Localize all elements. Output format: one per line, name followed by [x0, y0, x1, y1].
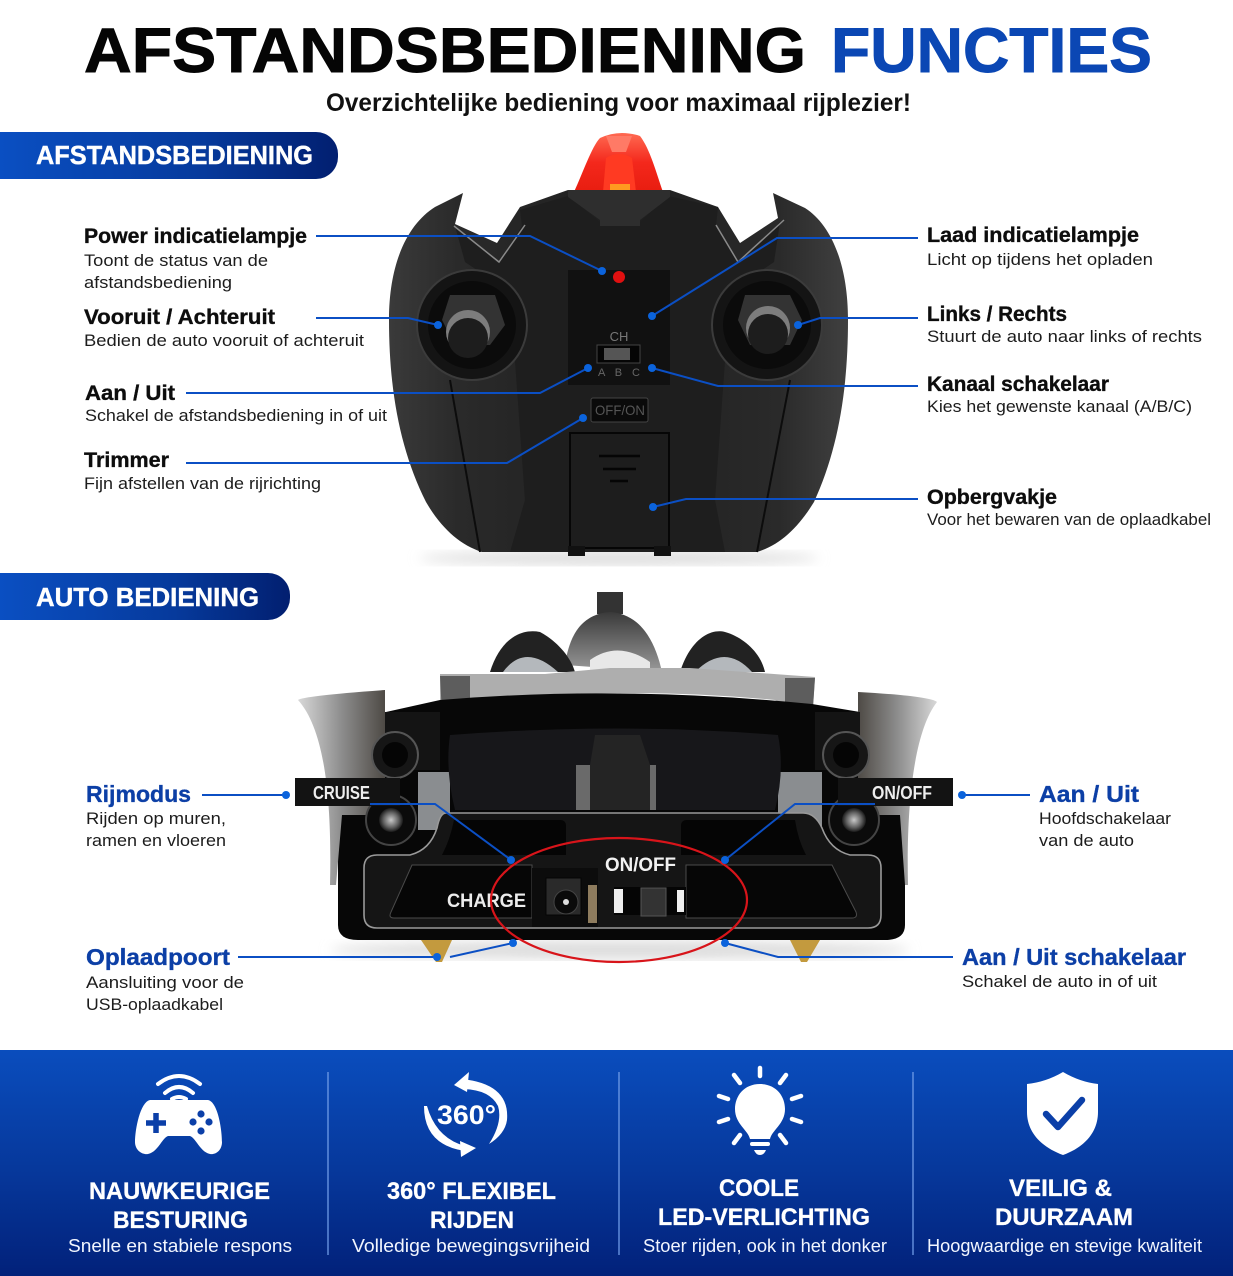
label: kanaal schakelaar: Kies het gewenste kanaal (A/B/C) [927, 397, 1192, 416]
label: power indicatielampje: afstandsbediening [84, 273, 232, 292]
car photo [295, 592, 953, 962]
section header: afstandsbediening: AFSTANDSBEDIENING [36, 140, 313, 170]
label: power indicatielampje: Power indicatielampje [84, 225, 307, 248]
feature: veilig en duurzaam [927, 1072, 1202, 1256]
off on switch: OFF/ON [595, 402, 645, 418]
heading: COOLE [719, 1175, 799, 1202]
left lights [366, 732, 418, 845]
section header: auto bediening: AUTO BEDIENING [36, 582, 259, 612]
on off tag: ON/OFF [872, 782, 932, 803]
label: oplaadpoort [86, 944, 244, 1014]
description: Stoer rijden, ook in het donker [643, 1236, 887, 1256]
label: kanaal schakelaar [927, 373, 1192, 416]
label: vooruit achteruit: Bedien de auto vooruit of achteruit [84, 331, 364, 350]
label: aan uit car: van de auto [1039, 831, 1134, 850]
lower windows [390, 865, 856, 918]
remote body [389, 190, 848, 552]
label: trimmer [84, 449, 321, 493]
label: rijmodus: ramen en vloeren [86, 831, 226, 850]
channel switch: A B C [598, 367, 640, 379]
channel switch: CH [610, 329, 628, 344]
label: links rechts [927, 303, 1202, 346]
remote upper centre [455, 196, 780, 552]
front panel [364, 813, 881, 928]
feature: 360 flexibel rijden [352, 1072, 590, 1256]
title: AFSTANDSBEDIENING [84, 16, 806, 86]
gold contacts [421, 940, 820, 962]
label: oplaadpoort: Aansluiting voor de [86, 973, 244, 992]
on off tag [838, 778, 953, 806]
upper vents [442, 820, 806, 855]
heading [387, 1178, 556, 1234]
charge label: CHARGE [447, 891, 526, 912]
left joystick [417, 270, 527, 380]
left exhaust dome [490, 631, 575, 672]
label: laad indicatielampje [927, 224, 1153, 269]
centre collar [568, 190, 670, 226]
heading: BESTURING [113, 1207, 248, 1234]
power switch [614, 887, 686, 916]
description: Hoogwaardige en stevige kwaliteit [927, 1236, 1202, 1256]
label: opbergvakje: Voor het bewaren van de oplaadkabel [927, 510, 1211, 529]
heading: DUURZAAM [995, 1204, 1133, 1231]
off on switch [591, 398, 648, 422]
heading [995, 1175, 1133, 1231]
label: links rechts: Stuurt de auto naar links of rechts [927, 327, 1202, 346]
right chrome fin [858, 692, 937, 885]
car shadow [330, 941, 910, 959]
heading: LED-VERLICHTING [658, 1204, 870, 1231]
subtitle: Overzichtelijke bediening voor maximaal rijplezier! [326, 89, 911, 117]
section header: auto bediening [0, 573, 290, 620]
label: oplaadpoort: USB-oplaadkabel [86, 995, 223, 1014]
right lights [823, 732, 879, 845]
label: aan uit schakelaar [962, 944, 1186, 991]
label: opbergvakje [927, 486, 1211, 529]
remote shadow [419, 551, 819, 565]
centre cavity [448, 728, 781, 810]
label: rijmodus: Rijmodus [86, 781, 191, 807]
label: aan uit schakelaar: Schakel de auto in of uit [962, 972, 1157, 991]
red highlight ellipse [491, 838, 747, 962]
label: opbergvakje: Opbergvakje [927, 486, 1057, 509]
label: rijmodus: Rijden op muren, [86, 809, 226, 828]
cockpit tower [565, 592, 662, 675]
title [84, 16, 1152, 86]
label: oplaadpoort: Oplaadpoort [86, 944, 230, 970]
title: FUNCTIES [831, 16, 1152, 86]
power led [613, 271, 625, 283]
label: trimmer: Fijn afstellen van de rijrichting [84, 474, 321, 493]
label: aan uit car: Hoofdschakelaar [1039, 809, 1171, 828]
label: aan uit car: Aan / Uit [1039, 781, 1139, 807]
right joystick [712, 270, 822, 380]
heading: 360° FLEXIBEL [387, 1178, 556, 1205]
label: rijmodus [86, 781, 226, 850]
icon: 360 arrows: 360° [437, 1100, 496, 1130]
remote control photo [389, 133, 848, 565]
cruise tag: CRUISE [313, 782, 370, 803]
label: links rechts: Links / Rechts [927, 303, 1067, 326]
description: Snelle en stabiele respons [68, 1236, 292, 1256]
right exhaust dome [680, 631, 765, 672]
label: laad indicatielampje: Licht op tijdens het opladen [927, 250, 1153, 269]
icon: shield check [1027, 1072, 1098, 1155]
charge port [532, 868, 598, 927]
remote callout lines [186, 236, 918, 511]
heading: VEILIG & [1009, 1175, 1112, 1202]
remote side seams [450, 380, 790, 552]
on off label: ON/OFF [605, 855, 676, 876]
label: laad indicatielampje: Laad indicatielampje [927, 224, 1139, 247]
icon: gamepad with wifi [135, 1076, 222, 1154]
label: vooruit achteruit: Vooruit / Achteruit [84, 306, 275, 329]
icon: 360 arrows [424, 1072, 507, 1157]
label: aan uit car [1039, 781, 1171, 850]
red antenna light [574, 133, 663, 192]
description: Volledige bewegingsvrijheid [352, 1236, 590, 1256]
heading: NAUWKEURIGE [89, 1178, 270, 1205]
feature band [0, 1050, 1233, 1276]
label: trimmer: Trimmer [84, 449, 169, 472]
label: aan uit remote: Schakel de afstandsbediening in of uit [85, 406, 387, 425]
grey side strips [418, 772, 822, 830]
car callout lines [202, 791, 1030, 961]
heading [89, 1178, 270, 1234]
heading [658, 1175, 870, 1231]
left chrome fin [298, 690, 385, 885]
label: power indicatielampje: Toont de status van de [84, 251, 268, 270]
label: kanaal schakelaar: Kanaal schakelaar [927, 373, 1109, 396]
label: vooruit achteruit [84, 306, 364, 350]
highlight ridges [454, 220, 784, 262]
label: aan uit schakelaar: Aan / Uit schakelaar [962, 944, 1186, 970]
channel switch [597, 329, 640, 379]
battery cover [568, 433, 671, 556]
icon: light bulb [719, 1068, 801, 1155]
feature: nauwkeurige besturing [68, 1076, 292, 1256]
cruise tag [295, 778, 400, 806]
label: power indicatielampje [84, 225, 307, 292]
section header: afstandsbediening [0, 132, 338, 179]
heading: RIJDEN [430, 1207, 514, 1234]
car main body [338, 693, 905, 940]
feature: coole led-verlichting [643, 1068, 887, 1256]
centre control panel [568, 270, 670, 385]
silver hood [440, 668, 815, 722]
label: aan uit remote: Aan / Uit [85, 382, 175, 405]
label: aan uit remote [85, 382, 387, 425]
